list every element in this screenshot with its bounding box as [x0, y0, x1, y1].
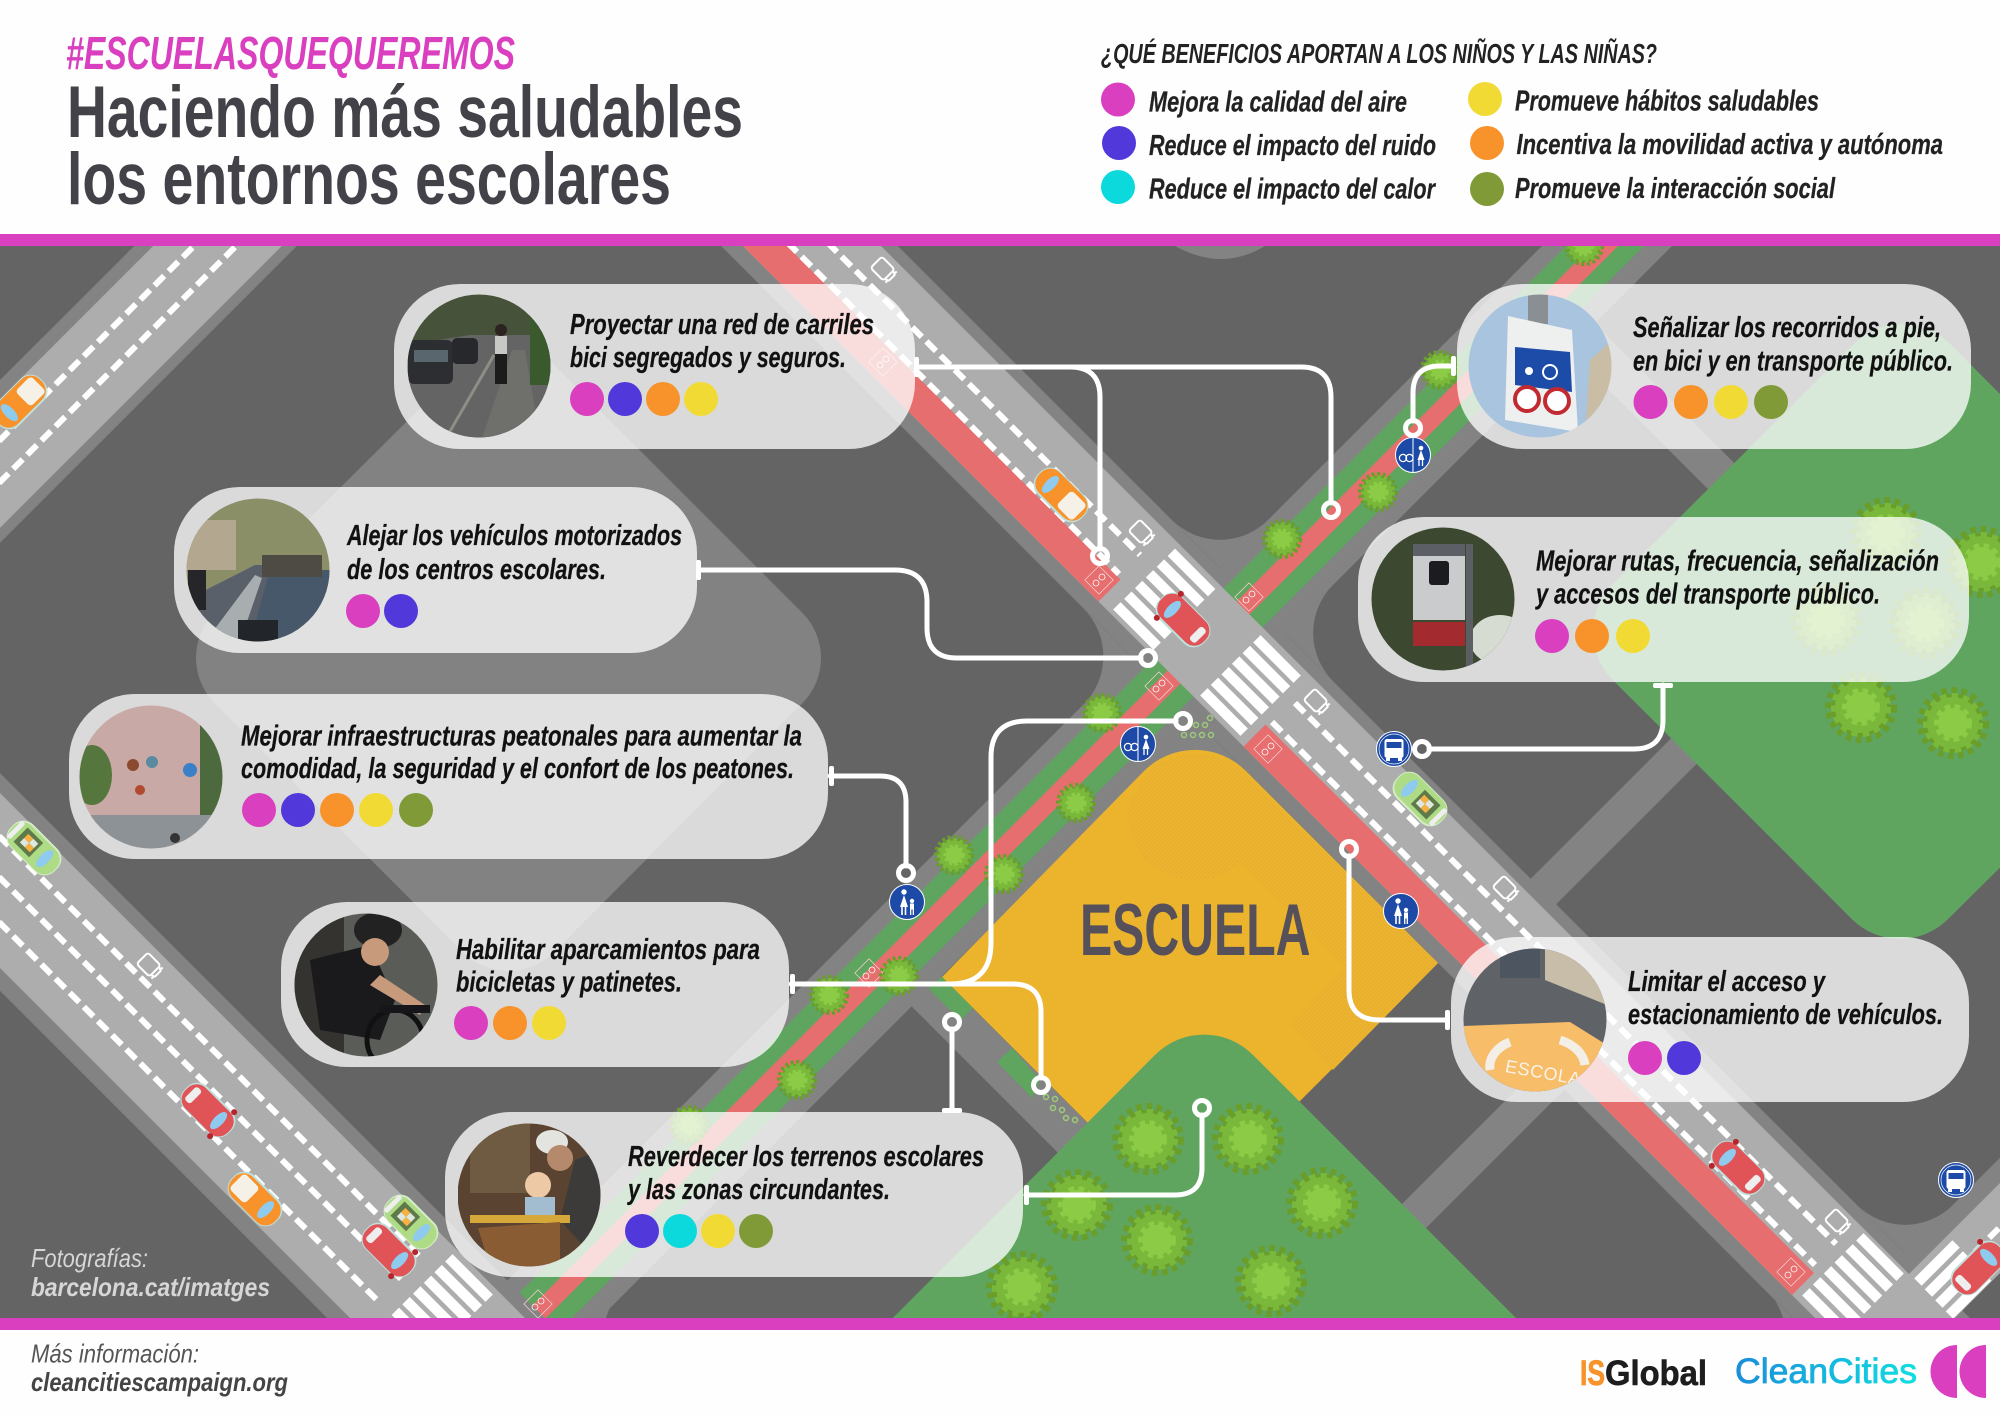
text: limitar acceso: Limitar el acceso y	[1628, 966, 1826, 998]
side streets	[926, 246, 1770, 1250]
school grounds	[942, 750, 1438, 1122]
legend item: air: Mejora la calidad del aire	[1149, 86, 1407, 118]
benefit dots	[570, 382, 718, 416]
bike lane markings	[524, 348, 1805, 1318]
text: alejar vehículos	[346, 520, 682, 586]
trees in garden	[993, 1110, 1351, 1316]
logo: CleanCities: CleanCities	[1735, 1352, 1917, 1391]
road C top left	[0, 246, 296, 542]
plaza block	[260, 410, 757, 907]
road A carriageway	[743, 246, 1909, 1318]
header: title block	[66, 27, 743, 220]
panel: limitar acceso	[1451, 937, 1969, 1102]
text: infraestructuras peatonales	[241, 720, 802, 785]
text: aparcamientos	[456, 934, 760, 998]
legend item: habits	[1468, 82, 1819, 118]
photo: pedestrians from above	[72, 705, 223, 849]
trees along road B	[673, 230, 1600, 1141]
connector: transporte público	[1414, 683, 1673, 756]
logo: ISGlobal: Global	[1605, 1354, 1707, 1393]
photo: school zone pavement	[1463, 948, 1607, 1092]
title line 1: Haciendo más saludables	[67, 72, 743, 153]
crosswalks	[392, 549, 1991, 1355]
benefit dots	[242, 793, 433, 827]
footer: more information	[31, 1338, 288, 1397]
connector: carriles bici	[914, 357, 1338, 564]
legend item: social: Promueve la interacción social	[1515, 173, 1836, 205]
photo: priority zone sign	[1468, 294, 1612, 438]
panel: infraestructuras peatonales	[69, 694, 828, 859]
benefit dots	[454, 1006, 566, 1040]
title line 2: los entornos escolares	[67, 139, 671, 220]
text: aparcamientos: bicicletas y patinetes.	[456, 966, 682, 998]
text: señalizar	[1633, 312, 1953, 378]
connector: infraestructuras peatonales	[829, 766, 914, 880]
park top right	[1661, 392, 2000, 871]
road B with green strips and bike lane	[508, 246, 1672, 1318]
footer: more information: cleancitiescampaign.org	[31, 1367, 288, 1397]
text: infraestructuras peatonales: Mejorar infraestructuras peatonales para aumentar la	[241, 720, 802, 752]
photo: scooter on bike lane	[407, 294, 551, 440]
text: transporte público	[1535, 546, 1939, 610]
connector: aparcamientos	[790, 714, 1190, 1092]
connector: limitar acceso	[1342, 842, 1450, 1030]
text: aparcamientos: Habilitar aparcamientos para	[456, 934, 760, 966]
text: carriles bici	[570, 309, 874, 374]
text: reverdecer: Reverdecer los terrenos escolares	[628, 1141, 984, 1173]
continuation of road A sidewalk	[1764, 1200, 1964, 1400]
panel: señalizar	[1457, 284, 1971, 449]
hashtag: #ESCUELASQUEQUEREMOS	[66, 27, 515, 79]
benefit dots	[625, 1214, 773, 1248]
legend item: heat: Reduce el impacto del calor	[1149, 174, 1436, 206]
legend heading: ¿QUÉ BENEFICIOS APORTAN A LOS NIÑOS Y LAS NIÑAS?	[1101, 38, 1657, 69]
photo: adult and child planting	[458, 1123, 602, 1267]
benefit dots	[346, 594, 418, 628]
text: alejar vehículos: de los centros escolares.	[347, 554, 606, 586]
panel: alejar vehículos	[174, 487, 697, 653]
legend item: social	[1470, 172, 1836, 206]
photo credit: Fotografías:	[31, 1243, 148, 1273]
road E bottom right sidewalk	[1905, 1158, 2000, 1266]
text: limitar acceso	[1628, 966, 1943, 1031]
top magenta band	[0, 234, 2000, 246]
school label: ESCUELA	[1080, 890, 1310, 971]
text: reverdecer	[627, 1141, 984, 1206]
legend item: heat	[1101, 170, 1436, 206]
street map background	[0, 246, 2000, 1318]
road A bike lane upper	[743, 246, 1120, 602]
panel: carriles bici	[394, 284, 915, 449]
legend item: air	[1101, 82, 1407, 118]
text: reverdecer: y las zonas circundantes.	[627, 1174, 890, 1206]
text: alejar vehículos: Alejar los vehículos motorizados	[346, 520, 682, 552]
logo: CleanCities	[1735, 1345, 1986, 1398]
panel: aparcamientos bicicletas	[281, 902, 789, 1070]
main road A sidewalk	[764, 200, 1764, 1200]
text: carriles bici: bici segregados y seguros.	[570, 342, 846, 374]
junction corner fillets	[600, 520, 1953, 1318]
text: transporte público: y accesos del transporte público.	[1535, 578, 1880, 610]
photo credit	[31, 1243, 270, 1302]
traffic signs	[890, 438, 1974, 1198]
photo: child on bicycle	[294, 914, 438, 1056]
bus lane markings	[137, 257, 1851, 1235]
road A bike lane lower	[1254, 736, 1803, 1284]
legend: benefits	[1101, 38, 1943, 206]
panel: reverdecer	[445, 1112, 1023, 1277]
legend item: habits: Promueve hábitos saludables	[1515, 86, 1819, 118]
connector: reverdecer garden	[1024, 1100, 1210, 1205]
photo credit: barcelona.cat/imatges	[31, 1272, 270, 1302]
bottom magenta band	[0, 1318, 2000, 1330]
benefit dots	[1535, 619, 1650, 653]
benefit dots	[1628, 1041, 1701, 1075]
green strips beside school	[929, 976, 1040, 1098]
trees in park	[1797, 504, 2000, 752]
school texture	[1128, 754, 1438, 1070]
panel: transporte público	[1358, 517, 1969, 682]
legend item: noise	[1102, 126, 1436, 162]
photo: school zone pavement: ESCOLA	[1504, 1056, 1582, 1089]
bike parking	[1044, 716, 1214, 1122]
connector: señalizar	[1406, 356, 1456, 436]
school garden	[893, 1034, 1516, 1318]
photo: bus stop sign	[1371, 527, 1530, 671]
footer: more information: Más información:	[31, 1338, 199, 1368]
road E carriageway	[1909, 1183, 2000, 1318]
legend item: noise: Reduce el impacto del ruido	[1149, 130, 1436, 162]
text: infraestructuras peatonales: comodidad, la seguridad y el confort de los peatones.	[241, 753, 794, 785]
photo: pedestrian street	[186, 498, 330, 642]
benefit dots	[1634, 385, 1788, 419]
road D lower left	[0, 774, 545, 1318]
text: carriles bici: Proyectar una red de carriles	[570, 309, 874, 341]
logo: ISGlobal: IS	[1580, 1354, 1605, 1393]
road E dashes	[1973, 1226, 2000, 1250]
connector: alejar vehículos	[696, 560, 1156, 666]
cars	[0, 369, 2000, 1304]
road A lane dashes	[745, 200, 1836, 1265]
connector: reverdecer sidewalk	[942, 1014, 962, 1113]
